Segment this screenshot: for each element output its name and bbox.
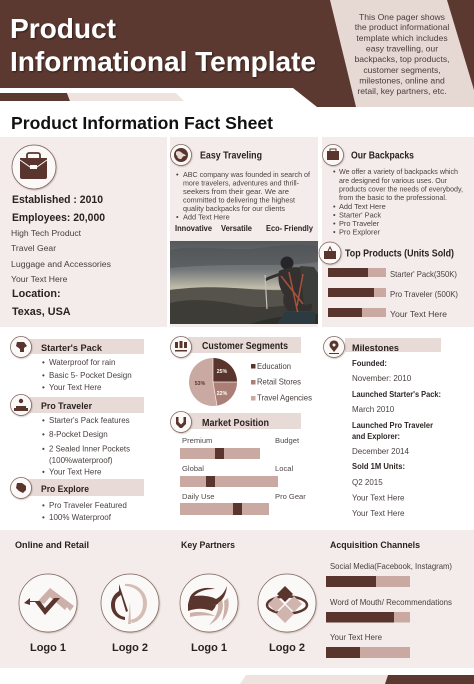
milestone list: Your Text Here [352,509,405,518]
logo 4: partner [258,574,316,632]
bar chart: units sold: Pro Traveler (500K) [390,289,458,299]
section: pro explore: • [42,501,45,510]
panel: customer segments [170,336,312,406]
bar chart: acquisition channels [326,561,452,658]
intro description: the product informational [355,22,449,32]
company facts: High Tech Product [11,228,82,238]
heading: Customer Segments [202,341,288,352]
bullet text: • [333,202,336,211]
pie chart: 22% [217,391,228,397]
bar chart: units sold: Your Text Here [390,309,447,319]
panel: milestones [324,336,441,518]
bullet text: are designed for various uses. Our [339,176,448,185]
intro description [354,12,450,96]
slider chart: Budget [275,436,300,445]
section: pro explore: • [42,513,45,522]
intro description: retail, key partners, etc. [357,86,447,96]
section: pro traveler: (100%waterproof) [49,456,113,465]
logo 1: online [19,574,77,632]
section: pro traveler: • [42,416,45,425]
milestone list: and Explorer: [352,432,400,441]
bullet text: committed to delivering the highest [183,196,295,204]
bullet text: Add Text Here [339,202,386,211]
icon: map pin [324,336,344,358]
title: Product [10,13,116,44]
intro description: easy travelling, our [366,44,438,54]
bullet text: • [333,228,336,236]
bullet text: Pro Traveler [339,219,380,228]
panel: partners and channels [0,530,474,668]
logo 1 label: Logo 1 [30,642,66,654]
milestone list: Q2 2015 [352,478,383,487]
section: pro traveler: • [42,468,45,476]
company facts: Location: [12,288,61,300]
logo 2: online [101,574,159,632]
pie chart: 25% [217,369,228,375]
logo 4 label: Logo 2 [269,642,305,654]
section: pro traveler: Starter's Pack features [49,416,130,425]
slider chart: Pro Gear [275,492,306,501]
subtitle: Product Information Fact Sheet [11,113,273,133]
bullet text: seekers from their gear. We are [183,187,289,196]
bullet text: from the basic to the professional. [339,193,447,202]
bullet text: • [333,210,336,220]
value labels: Eco- Friendly [266,223,313,233]
legend [251,362,312,402]
heading: top products: Top Products (Units Sold) [345,248,454,260]
section: pro traveler: • [42,444,45,454]
footer strip [240,675,474,684]
bullet text [333,167,463,236]
heading: key partners: Key Partners [181,540,235,550]
icon: top products [319,242,341,264]
heading: acquisition channels: Acquisition Channels [330,540,420,551]
photo: hiker on mountain [170,241,318,324]
bullet text: We offer a variety of backpacks which [339,167,458,176]
section: pro traveler: Your Text Here [49,468,102,476]
section: pro traveler: 2 Sealed Inner Pockets [49,444,130,454]
bullet text: Add Text Here [183,212,230,222]
pie chart [189,358,237,406]
milestone list: December 2014 [352,447,409,456]
bullet text [176,170,311,222]
title [10,13,316,77]
bar chart: units sold [328,268,458,319]
milestone list: November: 2010 [352,374,412,383]
icon: globe [170,144,192,166]
bullet text: Starter' Pack [339,210,381,220]
value labels [175,223,313,233]
value labels: Innovative [175,223,212,233]
bar chart: acquisition channels: Social Media(Facebook, Instagram) [330,561,452,571]
heading: Our Backpacks [351,150,414,162]
panel: market position [170,412,306,515]
icon: people [170,336,192,358]
milestone list: March 2010 [352,405,395,414]
bar chart: acquisition channels: Word of Mouth/ Recommendations [330,597,452,607]
section: pro explore: 100% Waterproof [49,513,112,522]
heading: Easy Traveling [200,150,262,162]
milestone list [352,359,441,518]
heading: Market Position [202,418,269,429]
company facts [11,194,111,318]
logo 2 label: Logo 2 [112,642,148,654]
icon: briefcase [12,145,56,189]
accent strip: pale [67,93,184,101]
company facts: Travel Gear [11,243,56,253]
icon: handshake [170,412,192,432]
slider chart: Daily Use [182,492,214,501]
section: pro explore: Pro Explore [41,484,89,495]
section: pro traveler [10,394,144,476]
bullet text: • [176,212,179,222]
milestone list: Sold 1M Units: [352,462,405,471]
bullet text: • [176,170,179,179]
intro description: customer segments, [363,65,441,75]
company facts: Your Text Here [11,274,68,284]
section: pro traveler: 8-Pocket Design [49,430,108,439]
panel: company profile [0,137,167,327]
bullet text: ABC company was founded in search of [183,170,311,179]
milestone list: Founded: [352,359,387,368]
section: pro traveler: Pro Traveler [41,401,92,412]
bullet text: Pro Explorer [339,228,381,236]
section: starter's pack: Basic 5- Pocket Design [49,371,132,380]
bullet text: products cover the needs of everybody, [339,184,463,194]
panel: our backpacks and top products [319,137,474,327]
legend: Retail Stores [257,378,301,386]
heading: Milestones [352,343,399,354]
milestone list: Launched Pro Traveler [352,421,433,430]
pie chart: 53% [195,381,206,387]
bullet text: • [333,167,336,176]
section: starter's pack: Waterproof for rain [49,358,115,367]
panel: product lines [10,336,144,522]
intro description: backpacks, top products, [354,54,450,64]
company facts: Established : 2010 [12,194,103,206]
section: pro traveler: • [42,430,45,439]
section: starter's pack [10,336,144,392]
intro panel background [330,0,474,107]
intro description: This One pager shows [359,12,445,22]
icon: backpacks [322,144,344,166]
bar chart: units sold: Starter' Pack(350K) [390,269,457,279]
section: starter's pack: • [42,371,45,380]
milestone list: Launched Starter's Pack: [352,390,441,399]
section: pro explore: Pro Traveler Featured [49,501,127,510]
slider chart: Local [275,464,293,473]
slider chart: Global [182,464,204,473]
legend: Education [257,362,291,371]
logo 3: partner [180,574,238,632]
accent strip: brown [0,93,70,101]
logo 3 label: Logo 1 [191,642,227,654]
section: starter's pack: • [42,358,45,367]
value labels: Versatile [221,223,252,233]
company facts: Texas, USA [12,306,71,318]
slider chart: Premium [182,436,212,445]
intro description: template which includes [356,33,448,43]
bullet text: more travelers, adventures and thrill- [183,178,300,188]
company facts: Luggage and Accessories [11,259,111,269]
bar chart: acquisition channels: Your Text Here [330,632,382,642]
slider chart [180,436,306,515]
section: starter's pack: Starter's Pack [41,343,103,354]
bullet text: quality backpacks for our clients [183,204,285,213]
title: Informational Template [10,46,316,77]
intro description: milestones, online and [359,76,445,86]
header banner [0,0,474,107]
legend: Travel Agencies [257,394,312,402]
milestone list: Your Text Here [352,494,405,502]
section: starter's pack: • [42,383,45,392]
section: pro explore [10,478,144,522]
heading: online and retail: Online and Retail [15,540,89,550]
company facts: Employees: 20,000 [12,212,105,224]
panel: easy traveling [170,137,318,327]
section: starter's pack: Your Text Here [49,383,102,392]
bullet text: • [333,219,336,228]
